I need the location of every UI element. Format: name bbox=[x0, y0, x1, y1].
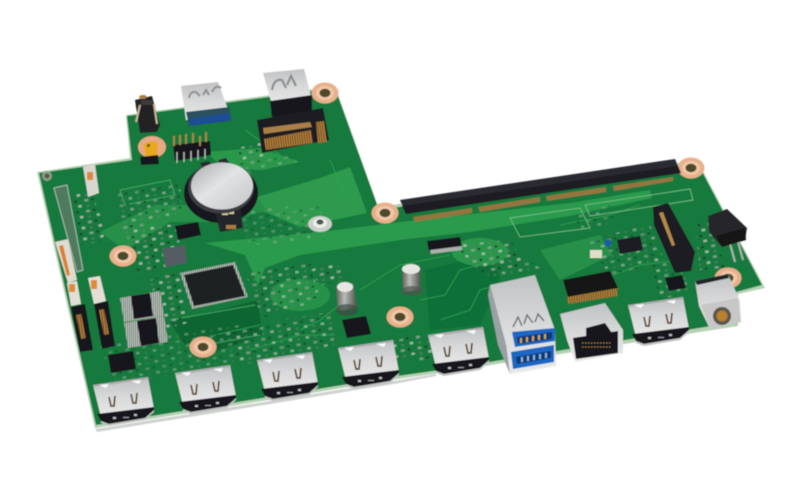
HDMI port 6 bbox=[628, 297, 689, 346]
mounting hole: lower right copper ring bbox=[714, 268, 742, 288]
chip: center right square bbox=[342, 316, 371, 338]
DC power jack bbox=[695, 274, 741, 329]
fan header bbox=[708, 209, 747, 262]
mounting hole: inner corner copper ring bbox=[372, 202, 398, 224]
SMD component clusters bbox=[70, 140, 725, 385]
jumper: yellow with copper ring bbox=[138, 136, 166, 165]
connector: top USB port bbox=[181, 82, 231, 126]
light copper plane: band across upper left bbox=[100, 185, 266, 250]
mounting hole: slot corner copper ring bbox=[678, 158, 704, 178]
mounting hole: left copper ring bbox=[110, 246, 136, 266]
connector: small white top left bbox=[83, 164, 99, 197]
connector: black left bbox=[71, 304, 93, 352]
light patch: center dotted bbox=[452, 238, 508, 266]
connector: top right USB port bbox=[263, 69, 312, 117]
mounting hole: top right copper ring bbox=[312, 82, 338, 104]
chip: left lower memory bbox=[124, 316, 168, 348]
dark zone: chip area bbox=[170, 300, 262, 352]
mounting hole: small top left bbox=[42, 171, 52, 181]
HDMI port 3 bbox=[257, 352, 318, 401]
chip: right small bbox=[617, 236, 643, 254]
traces bbox=[120, 130, 693, 350]
small chip near jack bbox=[665, 275, 686, 291]
light copper plane: long middle band bbox=[205, 190, 652, 285]
chip: main QFP processor bbox=[180, 262, 248, 309]
whole board photo group bbox=[37, 69, 765, 432]
crystal bbox=[590, 250, 602, 258]
light patch: lower right bbox=[540, 235, 612, 280]
connector: black right bbox=[94, 301, 115, 349]
drop shadow under board bbox=[95, 374, 436, 432]
RJ45 ethernet port bbox=[560, 303, 623, 362]
HDMI port 2 bbox=[175, 365, 236, 414]
memory slot: long black socket bbox=[400, 159, 681, 222]
connector: M.2 slot horizontal bbox=[257, 108, 329, 153]
HDMI port 1 bbox=[93, 377, 154, 426]
HDMI port 4 bbox=[338, 340, 399, 389]
connector: top barrel jack bbox=[135, 95, 160, 133]
mounting hole: center copper ring bbox=[386, 306, 414, 328]
HDMI port 5 bbox=[428, 327, 489, 376]
flat flex connector strip bbox=[54, 185, 83, 272]
board: green PCB bbox=[37, 86, 765, 428]
USB 3.0 stacked port bbox=[488, 275, 556, 374]
capacitor: blue bbox=[604, 240, 612, 246]
inductor: gray square bbox=[162, 245, 187, 267]
dark zone: right center bbox=[425, 255, 500, 330]
black connector above RJ45 bbox=[563, 271, 618, 304]
mounting hole: silver standoff pad bbox=[308, 216, 332, 232]
battery holder with coin cell bbox=[184, 158, 258, 232]
mounting hole: lower left copper ring bbox=[190, 336, 216, 358]
pin header bbox=[173, 132, 211, 163]
light copper plane: top strip bbox=[205, 148, 300, 170]
standoff post right bbox=[401, 264, 423, 296]
connector: long white bbox=[55, 239, 77, 283]
light copper plane: central area bbox=[225, 167, 367, 227]
ribbon connector bbox=[427, 237, 462, 254]
standoff post left bbox=[336, 282, 358, 316]
connector: white right bbox=[88, 276, 106, 304]
chip: lower left square bbox=[108, 351, 136, 373]
M.2 slot vertical bbox=[653, 203, 695, 273]
chip: small dark top bbox=[175, 222, 201, 240]
connector: white left bbox=[67, 281, 81, 306]
chip: left upper memory bbox=[120, 291, 164, 322]
